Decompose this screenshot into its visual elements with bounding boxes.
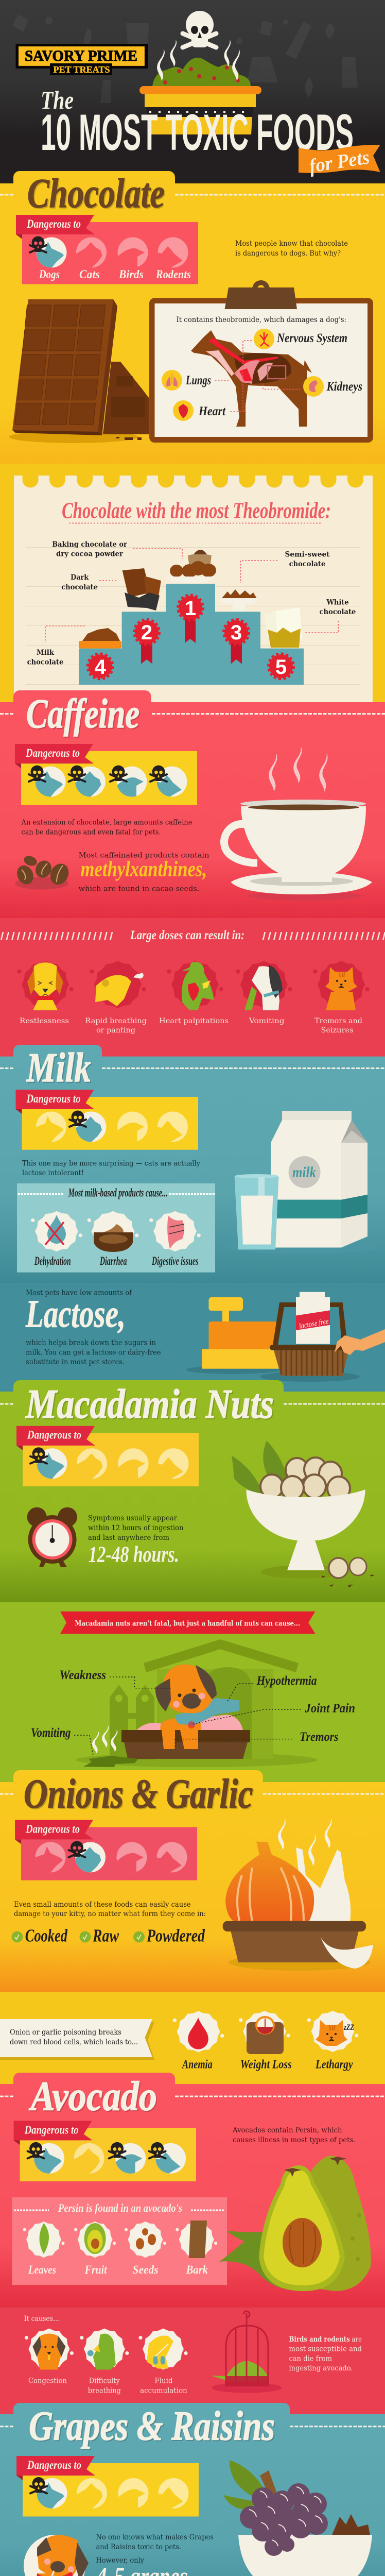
panel: dangerous to: Dangerous to [26,1092,81,1105]
illustration: bowl of macadamia nuts [232,1440,375,1587]
caffeine text: which are found in cacao seeds. [79,885,199,893]
onion text [14,1901,206,1918]
section: macadamia nuts [0,1380,385,1602]
text: birds and rodents [289,2335,362,2372]
panel: milk-based product effects: Most milk-based products cause... [68,1187,167,1199]
effect labels [181,2058,353,2072]
icon: vomiting [236,961,292,1010]
logo: Savory Prime Pet Treats [15,44,148,75]
caffeine text: can be dangerous and even fatal for pets. [22,828,161,837]
podium chart: 2 [141,621,152,644]
chocolate labels: White [326,599,349,607]
chocolate labels: chocolate [27,658,63,666]
symptom labels with leader lines [31,1668,355,1756]
title: The [41,86,74,114]
symptom labels: Seizures [321,1026,353,1035]
illustration: chocolate bar [9,299,149,443]
icon: fluid accumulation [138,2329,188,2370]
caffeine text: Most caffeinated products contain [79,851,209,859]
symptom labels: Fluid [154,2377,173,2385]
callout: red blood cells [0,2019,154,2060]
milk text: lactose intolerant! [22,1169,84,1177]
banner: for Pets: for Pets [308,146,371,177]
banner: nuts cause [60,1612,316,1634]
symptom labels: Heart palpitations [159,1017,229,1025]
lactose text: milk. You can get a lactose or dairy-free [26,1349,161,1357]
podium chart: 4 [95,656,107,679]
symptom labels with leader lines: Tremors [300,1730,339,1744]
section: onion poisoning effects [0,1992,385,2085]
grapes text: No one knows what makes Grapes [96,2533,214,2541]
panel: milk-based product effects: Diarrhea [99,1255,127,1267]
section: lactose [0,1283,385,1394]
panel: milk-based product effects: Digestive issues [151,1255,199,1267]
panel: dangerous to: Dangerous to [24,2123,79,2136]
illustration: onion, garlic, pot [223,1818,373,1971]
effect labels: Lethargy [315,2058,353,2072]
icon: anemia [173,2011,224,2052]
macadamia text [88,1514,183,1567]
icon: coffee beans [14,854,72,889]
section: grapes and raisins [0,2403,385,2576]
icon: alarm clock [27,1507,77,1567]
text: birds and rodents: Birds and rodents are [289,2335,362,2344]
symptom labels: accumulation [140,2386,187,2395]
illustration: grapes and raisins bowl [223,2460,373,2576]
icon: heart palpitations [167,961,223,1010]
symptom labels with leader lines: Vomiting [31,1726,71,1740]
avocado intro text: Avocados contain Persin, which [232,2126,342,2134]
onion text: Even small amounts of these foods can easily cause [14,1901,191,1909]
heading: Caffeine: Caffeine [26,691,139,737]
forms: cooked, raw, powdered: Raw [92,1926,119,1946]
chocolate labels: Dark [71,573,89,582]
heading: large doses can result in: Large doses can result in: [130,928,244,942]
section: chocolate [0,171,385,464]
lactose text [25,1289,161,1366]
heading: Grapes & Raisins: Grapes & Raisins [29,2403,275,2449]
icon: lethargy [307,2011,358,2052]
illustration: sick dog with thermometer [24,2535,89,2576]
milk text: This one may be more surprising — cats are actually [22,1159,201,1167]
intro text [235,240,348,258]
panel: dangerous to: Rodents [155,268,191,281]
heading: Chocolate: Chocolate [27,171,165,216]
symptom labels: Difficulty [89,2377,120,2385]
chocolate labels: Baking chocolate or [52,540,127,549]
caffeine text: methylxanthines, [80,858,207,882]
section: large doses [0,918,385,1057]
organ labels: Nervous System [276,331,347,345]
panel: dangerous to [14,2121,196,2181]
text: birds and rodents: most susceptible and [289,2345,362,2353]
macadamia text: and last anywhere from [88,1534,169,1542]
panel: dangerous to: Dangerous to [27,2459,81,2471]
symptom labels: or panting [96,1026,135,1035]
panel: milk-based product effects [17,1183,215,1273]
podium chart: 5 [275,656,287,679]
intro text: Most people know that chocolate [235,240,348,248]
organ labels: Heart [198,404,226,418]
panel: dangerous to: Birds [118,268,144,281]
rank 5 food: white chocolate [264,607,302,648]
panel: dangerous to: Dangerous to [26,217,81,230]
lactose text: Lactose, [25,1293,126,1336]
rank 2 food: dark chocolate [122,568,161,611]
panel: dangerous to: Cats [79,268,100,281]
heading: Milk: Milk [26,1045,91,1091]
icon: difficulty breathing [80,2329,129,2370]
panel: where persin is found: Bark [186,2263,208,2276]
text: birds and rodents: can die from [289,2354,332,2363]
illustration: basket with lactose-free milk: lactose free [299,1317,329,1331]
chocolate labels: chocolate [289,560,325,568]
callout: red blood cells: down red blood cells, which leads to... [10,2038,138,2046]
icon: weight loss [239,2011,290,2054]
chocolate labels: chocolate [320,608,356,616]
intro text: is dangerous to dogs. But why? [235,249,341,258]
avocado intro text: causes illness in most types of pets. [233,2136,355,2144]
clipboard: theobromine damage [149,280,373,443]
caffeine text: An extension of chocolate, large amounts caffeine [21,819,192,827]
symptom labels: Vomiting [249,1017,284,1025]
macadamia text: Symptoms usually appear [88,1514,178,1522]
panel: where persin is found [12,2197,227,2285]
text: birds and rodents: ingesting avocado. [289,2364,353,2372]
illustration: toxic food bowl with skull [139,11,261,134]
illustration: milk carton and glass: milk [292,1164,316,1181]
grapes text [96,2533,214,2576]
chocolate labels: Milk [37,649,54,657]
panel: dangerous to [15,1820,197,1880]
podium chart: 3 [231,621,242,644]
symptom labels [28,2377,187,2395]
grapes text: However, only [96,2556,145,2565]
heading: Avocado: Avocado [28,2074,157,2120]
panel: dangerous to: Dangerous to [27,1429,81,1442]
illustration: milk carton and glass [225,1111,379,1254]
panel: dangerous to: Dangerous to [25,747,80,759]
icon: tremors and seizures [313,961,370,1010]
chocolate labels: chocolate [61,583,98,591]
section: avocado effects [0,2307,385,2415]
faint food silhouettes [13,14,358,103]
section: avocado effects: It causes... [24,2315,59,2323]
heading: Onions & Garlic: Onions & Garlic [24,1771,253,1817]
header panel [0,0,385,185]
caffeine text [21,819,209,893]
panel: where persin is found: Persin is found in an avocado's [58,2201,182,2214]
rank 4 food: milk chocolate [79,628,121,649]
panel: dangerous to [15,1090,198,1150]
lactose text: Most pets have low amounts of [26,1289,132,1297]
lactose text: which helps break down the sugars in [26,1338,156,1347]
illustration: sick dog in bed [76,1639,318,1767]
symptom labels: Rapid breathing [85,1017,147,1025]
macadamia text: 12-48 hours. [89,1542,179,1567]
podium chart [79,584,304,685]
logo: Savory Prime Pet Treats: PET TREATS [54,64,110,75]
section: milk [0,1045,385,1283]
panel: dangerous to [16,215,198,284]
forms: cooked, raw, powdered: Cooked [25,1926,67,1946]
avocado intro text [232,2126,355,2144]
panel: dangerous to [16,2456,199,2516]
section: macadamia effects [0,1602,385,1784]
effect labels: Weight Loss [240,2058,292,2072]
chocolate labels: Semi-sweet [285,551,330,559]
rank 1 food: cocoa powder and truffles [165,550,216,583]
symptom labels [20,1017,362,1035]
heading: Macadamia Nuts: Macadamia Nuts [25,1382,274,1427]
symptom labels: Restlessness [20,1017,69,1025]
panel: dangerous to [16,1426,199,1486]
banner: nuts cause: Macadamia nuts aren't fatal, but just a handful of nuts can cause... [75,1619,300,1628]
icon: congestion [25,2329,74,2370]
panel: where persin is found: Leaves [28,2263,56,2276]
panel: milk-based product effects: Dehydration [34,1255,71,1267]
heading: large doses can result in [0,928,385,942]
rank 3 food: semi-sweet chocolate [220,589,258,611]
organ labels: Kidneys [326,380,362,394]
symptom labels: Congestion [28,2377,67,2385]
lactose text: substitute in most pet stores. [26,1358,125,1366]
illustration: avocado [219,2156,371,2291]
symptom labels: Tremors and [314,1017,362,1025]
symptom labels with leader lines: Joint Pain [305,1701,355,1715]
effect labels: Anemia [181,2058,213,2072]
panel: where persin is found: Seeds [133,2263,159,2276]
dog anatomy diagram [191,330,312,427]
icon: lethargy: zZZ [343,2023,354,2032]
onion text: damage to your kitty, no matter what form they come in: [14,1910,206,1918]
logo: Savory Prime Pet Treats: SAVORY PRIME [25,47,137,64]
icon: restlessness [17,961,74,1010]
panel: dangerous to: Dogs [39,268,60,281]
milk text [22,1159,201,1177]
panel: dangerous to [15,744,197,805]
organ labels [162,329,362,421]
illustration: bird in cage [211,2311,282,2393]
symptom labels with leader lines: Hypothermia [256,1674,317,1688]
illustration: cash register [186,1297,281,1374]
symptom labels: breathing [88,2386,121,2395]
icon: rapid breathing [90,961,146,1008]
organ labels: Lungs [185,374,211,387]
panel: where persin is found: Fruit [84,2263,107,2276]
section: onions and garlic [0,1770,385,1992]
section: avocado [0,2073,385,2307]
illustration: basket with lactose-free milk [260,1292,385,1382]
podium chart: 1 [185,597,196,620]
clipboard: theobromine damage: It contains theobromide, which damages a dog's: [176,316,346,324]
macadamia text: within 12 hours of ingestion [88,1524,183,1532]
section: chocolate ranking [0,464,385,706]
chocolate labels: dry cocoa powder [56,550,123,558]
chocolate labels [27,540,356,666]
forms: cooked, raw, powdered: Powdered [146,1926,205,1946]
section: caffeine [0,690,385,918]
panel: dangerous to: Dangerous to [25,1822,80,1835]
grapes text: and Raisins toxic to pets. [96,2543,181,2551]
callout: red blood cells: Onion or garlic poisoning breaks [10,2028,121,2037]
paper note [14,476,373,706]
forms: cooked, raw, powdered [11,1926,205,1946]
illustration: coffee cup [224,747,372,901]
symptom labels with leader lines: Weakness [60,1668,106,1682]
